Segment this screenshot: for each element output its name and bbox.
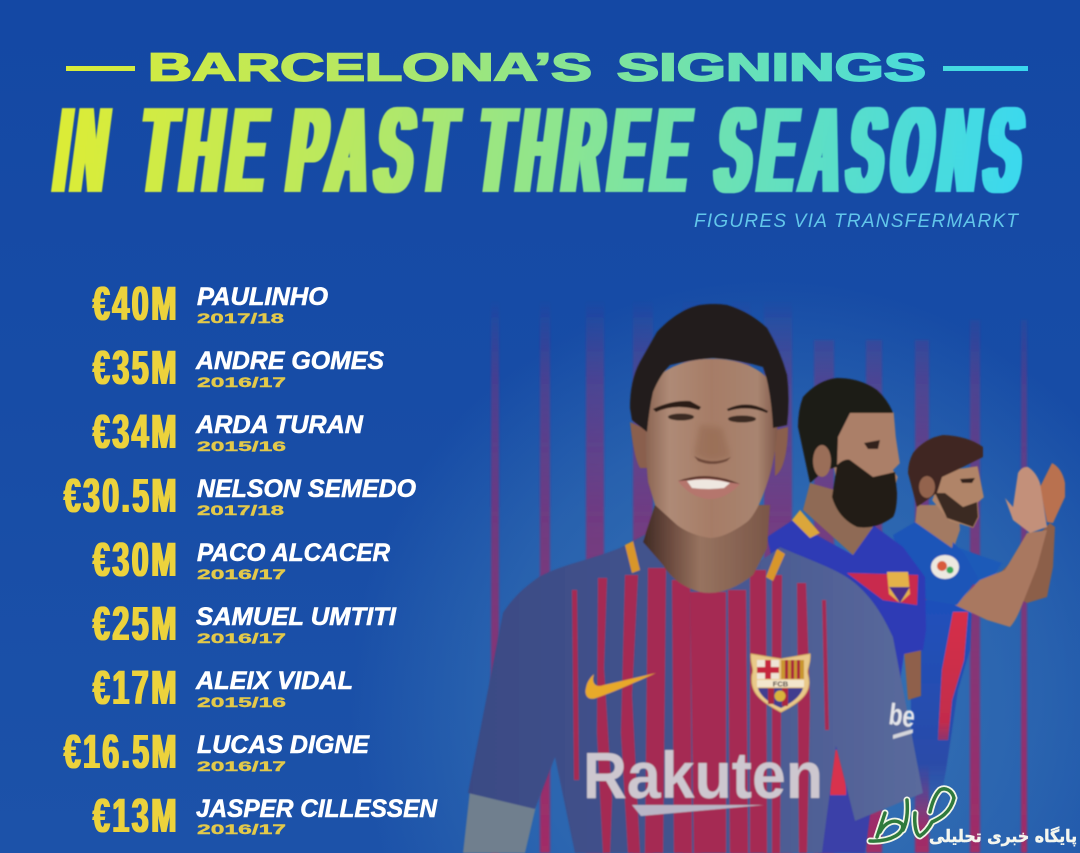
rear arm (990, 523, 1055, 603)
row: Jasper Cillessen: €13M (93, 790, 179, 843)
club crest (751, 654, 810, 712)
title: Barcelona's signings: BARCELONA’S (148, 46, 592, 90)
title: Barcelona's signings (66, 46, 1028, 90)
teeth (687, 479, 730, 489)
row: Samuel Umtiti: SAMUEL UMTITI (196, 603, 397, 631)
row: Lucas Digne: 2016/17 (197, 758, 286, 774)
shirt stripes (572, 568, 829, 853)
face (646, 359, 777, 538)
sponsor: Rakuten: Rakuten (583, 738, 823, 812)
eyebrows (653, 401, 768, 413)
title: in the past three seasons (48, 81, 1040, 218)
row: Paco Alcacer (93, 534, 390, 587)
collar (792, 510, 820, 538)
face (832, 410, 899, 500)
shirt (468, 532, 923, 853)
title: in the past three seasons: IN (48, 81, 121, 218)
nose base (694, 456, 731, 464)
title: Barcelona's signings: SIGNINGS (617, 46, 926, 90)
signings list (64, 278, 438, 843)
eye (960, 478, 975, 483)
eyes (668, 414, 756, 422)
row: Andre Gomes (93, 342, 384, 395)
row: Aleix Vidal: 2015/16 (197, 694, 286, 710)
ear (919, 476, 935, 498)
bare arm (463, 790, 536, 853)
player: Arda Turan (767, 378, 926, 853)
row: Paulinho: PAULINHO (197, 283, 329, 311)
club crest: FCB (773, 680, 789, 688)
jersey red stripe (938, 612, 968, 740)
row: Nelson Semedo: NELSON SEMEDO (197, 475, 417, 503)
eye (864, 440, 880, 449)
row: Samuel Umtiti: 2016/17 (197, 630, 286, 646)
row: Arda Turan: ARDA TURAN (195, 411, 364, 439)
row: Lucas Digne (64, 726, 370, 779)
row: Andre Gomes: 2016/17 (197, 374, 286, 390)
row: Andre Gomes: ANDRE GOMES (195, 347, 384, 375)
row: Andre Gomes: €35M (93, 342, 179, 395)
front sleeve and shoulder (893, 522, 978, 605)
beard (935, 493, 978, 527)
rear hand (1040, 463, 1065, 523)
title: in the past three seasons: PAST (282, 81, 473, 218)
row: Paco Alcacer: 2016/17 (197, 566, 286, 582)
row: Aleix Vidal: €17M (93, 662, 179, 715)
row: Arda Turan: 2015/16 (197, 438, 286, 454)
ears (630, 422, 788, 476)
row: Arda Turan: €34M (93, 406, 179, 459)
row: Samuel Umtiti: €25M (93, 598, 179, 651)
row: Paco Alcacer: €30M (93, 534, 179, 587)
row: Nelson Semedo (64, 470, 417, 523)
front hand (1005, 467, 1047, 533)
beard (832, 460, 897, 528)
row: Lucas Digne: €16.5M (64, 726, 179, 779)
ear (813, 445, 831, 477)
row: Nelson Semedo: 2017/18 (197, 502, 284, 518)
nike swoosh (585, 673, 656, 699)
row: Aleix Vidal (93, 662, 353, 715)
neck (915, 505, 960, 550)
row: Jasper Cillessen: 2016/17 (197, 821, 286, 837)
player: Paulinho (463, 304, 923, 853)
source note: FIGURES VIA TRANSFERMARKT (694, 211, 1019, 232)
front arm (955, 530, 1047, 627)
row: Jasper Cillessen (93, 790, 438, 843)
crest (887, 572, 910, 603)
nose (694, 425, 730, 461)
row: Jasper Cillessen: JASPER CILLESSEN (196, 795, 438, 823)
title: in the past three seasons: THREE (472, 81, 707, 218)
row: Aleix Vidal: ALEIX VIDAL (195, 667, 353, 695)
jersey (767, 520, 926, 680)
rear sleeve (952, 545, 1002, 585)
row: Paco Alcacer: PACO ALCACER (197, 539, 390, 567)
lower jersey (818, 740, 880, 853)
sleeve sponsor: be (887, 698, 917, 734)
mouth shadow (678, 476, 740, 484)
neck (803, 483, 873, 555)
mouth (678, 476, 740, 499)
row: Paulinho: 2017/18 (197, 310, 284, 326)
neck (643, 505, 770, 593)
row: Paulinho: €40M (93, 278, 179, 331)
player: Andre Gomes (893, 435, 1065, 830)
hair (630, 304, 788, 432)
hair (908, 435, 983, 507)
league badge (931, 555, 959, 579)
watermark: calligraphic logo (870, 789, 954, 841)
collar trim (625, 541, 785, 581)
row: Samuel Umtiti (93, 598, 397, 651)
jersey body (910, 600, 972, 830)
row: Paulinho (93, 278, 329, 331)
face (933, 467, 983, 527)
row: Lucas Digne: LUCAS DIGNE (197, 731, 370, 759)
hair (798, 378, 893, 483)
arm (904, 650, 921, 700)
title: in the past three seasons: THE (134, 81, 284, 218)
row: Arda Turan (93, 406, 364, 459)
red chest band (847, 573, 918, 605)
background stripes (491, 300, 1027, 853)
watermark (870, 789, 1077, 847)
row: Nelson Semedo: €30.5M (64, 470, 179, 523)
